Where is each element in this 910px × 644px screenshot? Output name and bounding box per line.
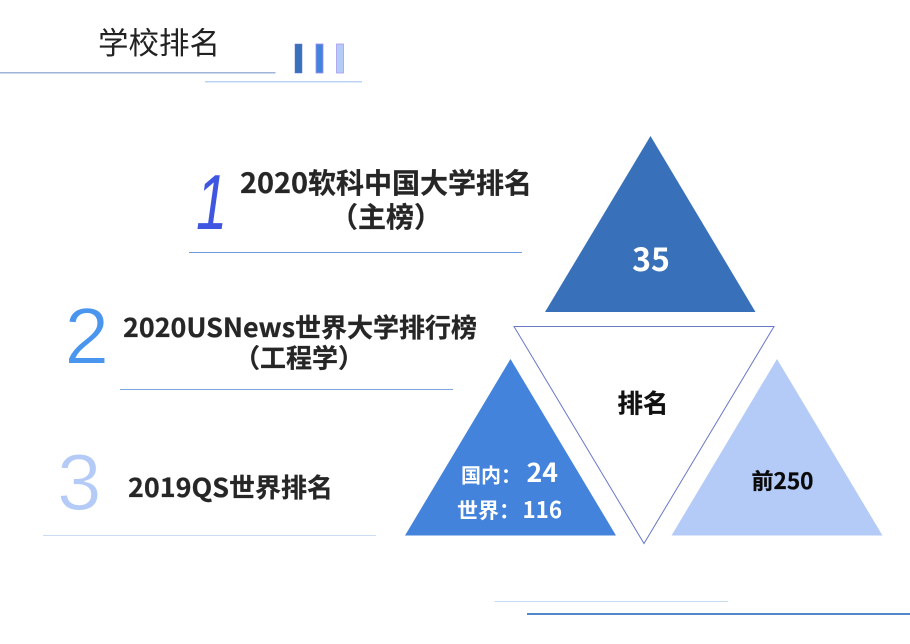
ranking item 2: 2 (64, 292, 109, 380)
triangle: left domestic and world: 116 (522, 491, 562, 525)
triangle: left domestic and world (405, 359, 616, 536)
triangle: centre ranking (514, 326, 774, 544)
triangle: left domestic and world: 世界： (457, 495, 520, 525)
triangle: left domestic and world: 国内： (461, 460, 521, 488)
icon: three bars (295, 44, 344, 73)
ranking item 2: （工程学） (234, 338, 364, 376)
ranking item 2: 世界大学排行榜 (295, 308, 477, 345)
triangle: top 35: 35 (632, 235, 670, 281)
triangle: top 35 (545, 136, 756, 312)
ranking item 1: 1 (196, 159, 227, 246)
ranking item 1: 2020 (240, 162, 308, 202)
triangle: left domestic and world: 24 (526, 453, 558, 490)
triangle: right top 250: 前250 (752, 464, 814, 496)
ranking item 3: 世界排名 (229, 468, 333, 505)
ranking item 2: 2020USNews (123, 308, 295, 345)
ranking item 1: 软科中国大学排名 (308, 162, 532, 202)
footer lines (494, 601, 910, 615)
triangle: right top 250 (672, 359, 882, 536)
ranking item 2 (64, 292, 477, 390)
ranking item 1 (189, 159, 532, 253)
ranking item 3: 3 (57, 438, 102, 526)
ranking item 3: 2019QS (128, 468, 229, 505)
ranking item 1: （主榜） (330, 196, 442, 236)
ranking item 3 (43, 438, 376, 536)
title: 学校排名 (98, 19, 220, 63)
triangle: centre ranking: 排名 (617, 384, 669, 420)
